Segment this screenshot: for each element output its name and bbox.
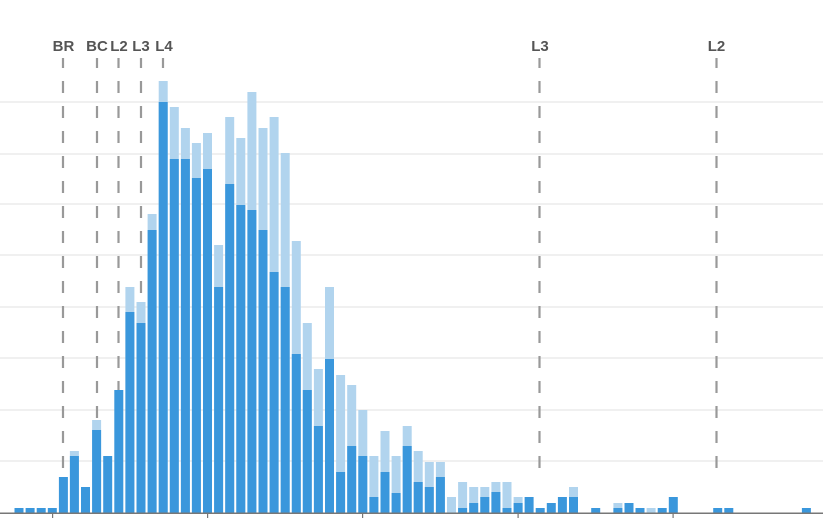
dark bars: lower segment of stacked histogram — [14, 102, 811, 513]
marker: BR: BR — [53, 38, 74, 55]
light bars: upper segment of stacked histogram — [70, 81, 656, 513]
x axis with ticks — [0, 512, 823, 518]
marker: L3 left: L3 — [132, 38, 150, 55]
marker: L3 right: L3 — [531, 38, 549, 55]
marker: L2 left: L2 — [110, 38, 128, 55]
marker: L2 right: L2 — [708, 38, 725, 55]
marker: BC: BC — [86, 38, 108, 55]
marker: L4: L4 — [155, 38, 173, 55]
